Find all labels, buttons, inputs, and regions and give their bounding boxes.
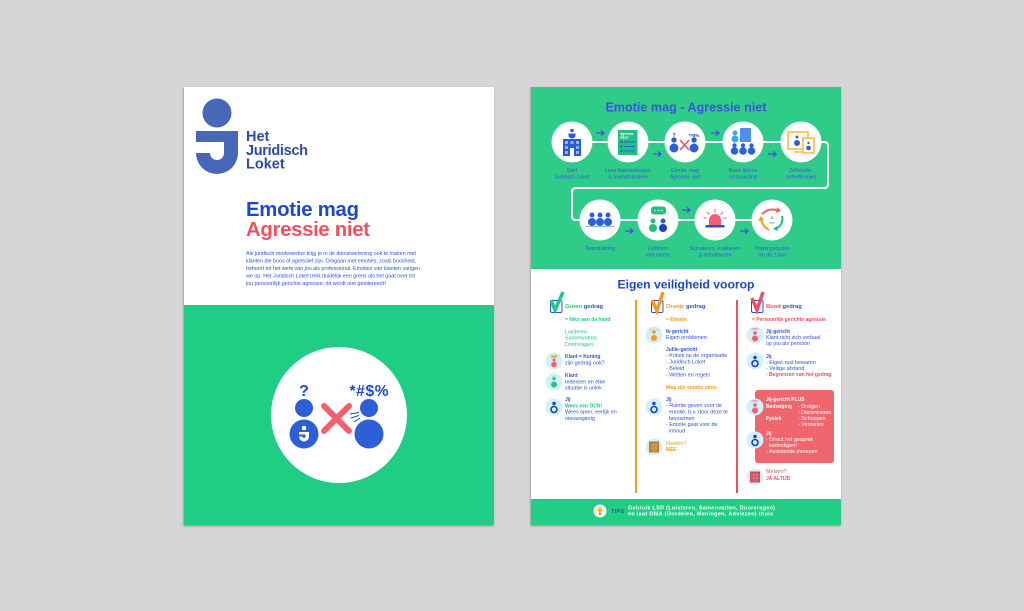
logo wordmark [246, 129, 308, 172]
step: agressiewijzer: Agressie [620, 132, 634, 136]
summary: = Emotie [666, 317, 687, 323]
heading: eigen veiligheid voorop: Eigen veiligheid voorop [618, 278, 754, 292]
step: emotie mag agressie niet: Agressie niet [670, 174, 701, 180]
text: klant: Klant [565, 373, 578, 379]
step: basis tijdens on-boarding: Basis tijdens [728, 168, 758, 174]
icon: light bulb [594, 504, 606, 518]
text: threat types: - Dreigen [798, 404, 820, 410]
text: jij: - Eigen rust bewaren [766, 360, 816, 366]
tips text [628, 506, 775, 518]
icon: client [546, 374, 562, 390]
text: jij: Jij [565, 397, 571, 403]
text: jij-gericht [766, 329, 820, 347]
step: teamtraining [580, 200, 620, 252]
text: jullie-gericht [666, 347, 727, 378]
intro paragraph: Als juridisch medewerker krijg je in de dienstverlening ook te maken met [246, 251, 416, 257]
step: oefenen met acteur: met acteur [646, 252, 671, 258]
text: threat types: - Schoppen [798, 416, 826, 422]
text: jij: Wees open, eerlijk en [565, 410, 617, 416]
illustration: client confrontation [271, 347, 407, 483]
text: jij: Wees een OCN! [565, 404, 602, 410]
text: threat types [766, 397, 831, 428]
list: LSD: Samenvatten [565, 336, 597, 342]
text: jij actions: Jij [766, 431, 772, 437]
text: jij-gericht: Klant richt zich verbaal [766, 335, 820, 341]
icon: jij [646, 398, 662, 416]
text: klant koning [565, 354, 605, 366]
logo wordmark: Het [246, 129, 270, 145]
title: Emotie mag - Agressie niet [606, 100, 767, 114]
icon: orange check [652, 292, 663, 312]
icon: jij [546, 398, 562, 416]
text: jij: - Ruimte geven voor de [666, 403, 722, 409]
text: threat types: Fysiek [766, 416, 782, 422]
text: threat types: Bedreiging [766, 404, 792, 410]
text: threat types: - Discrimineren [798, 410, 831, 416]
step: trainingscyclus: om de 2 jaar [758, 252, 787, 258]
text: melden [766, 469, 791, 482]
step: signaleren: & actualiseren [699, 252, 732, 258]
connector path [572, 142, 828, 220]
step: trainingscyclus: 2 [771, 215, 774, 220]
text: jij-gericht: op jou als persoon [766, 341, 810, 347]
intro paragraph: behoort tot het werk van jou als professional. Emoties van klanten vangen [246, 266, 420, 272]
step: emotie mag agressie niet [664, 122, 706, 180]
intro paragraph: jou persoonlijk gerichte agressie: dit wordt niet getolereerd! [245, 281, 386, 287]
text: jij: - Begrenzen van het gedrag [766, 372, 832, 378]
text: jij: Jij [666, 397, 672, 403]
divider red [736, 300, 738, 493]
icon: angry person: *#$% [751, 327, 759, 331]
heading: Emotie mag [246, 199, 359, 221]
text: jij-gericht: Jij-gericht [766, 329, 790, 335]
callout: threat box [746, 390, 834, 463]
icon: red check [752, 292, 763, 312]
person with logo: ? [299, 383, 309, 400]
icon: angry person: *#$% [751, 399, 759, 403]
step: basis tijdens on-boarding [722, 122, 764, 180]
icon: ik [646, 326, 662, 344]
text: melden [666, 441, 687, 453]
panel: front page green lower section [184, 305, 494, 525]
text: jij: - Veilige afstand [766, 366, 804, 372]
text: klant koning: zijn gedrag ook? [565, 360, 605, 366]
intro paragraph: klanten die boos of agressief zijn. Omgaan met emoties, zoals boosheid, [246, 258, 416, 264]
step: emotie mag agressie niet: *#$% [689, 133, 699, 138]
text: jij [766, 354, 832, 378]
step: trainingscyclus: Trainingscyclus [754, 246, 790, 252]
text: jij actions: - Assistentie inroepen [766, 449, 818, 455]
text: jullie-gericht: - Kritiek op de organisatie [666, 353, 727, 359]
callout: Mag zijn emotie uiten [666, 385, 717, 391]
text: jij actions [766, 431, 818, 455]
text: jij: nieuwsgierig [565, 416, 595, 422]
step: agressiewijzer: Lees Agressiewijzer [605, 168, 651, 174]
text: jullie-gericht: - Wetten en regels [666, 372, 710, 378]
panel: rood gedrag [746, 292, 834, 486]
arrows row 2 [625, 208, 748, 234]
step: zelfstudie: oefenfilmpjes [786, 174, 817, 180]
step: oefenen met acteur: Oefenen [648, 246, 668, 252]
text: melden: Melden? [766, 469, 787, 475]
list: LSD: Luisteren [565, 330, 587, 336]
text: klant: situatie is uniek [565, 386, 602, 392]
heading: Agressie niet [246, 219, 370, 241]
icon: jij [746, 432, 764, 448]
tips text: Gebruik LSD (Luisteren, Samenvatten, Doorvragen) [628, 506, 775, 512]
summary: = Persoonlijk gerichte agressie [752, 317, 826, 323]
text: jij: benoemen [669, 416, 694, 422]
text: jij: inhoud [669, 428, 685, 434]
step: agressiewijzer: & teamafspraken [608, 174, 648, 180]
step: trainingscyclus [752, 200, 792, 258]
text: ik-gericht [666, 329, 707, 341]
step: start: Juridisch Loket [555, 174, 590, 180]
text: klant koning: Klant = Koning [565, 354, 600, 360]
text: ik-gericht: Ik-gericht [666, 329, 689, 335]
step: emotie mag agressie niet: Emotie mag [671, 168, 699, 174]
step: signaleren: Signaleren, evalueren [690, 246, 740, 252]
text: melden: Melden? [666, 441, 687, 447]
arrows row 1 [596, 130, 776, 156]
heading [246, 199, 370, 241]
panel: training journey [531, 87, 841, 269]
step: trainingscyclus: jaar [768, 220, 775, 224]
step: signaleren [690, 200, 740, 258]
text: jullie-gericht: - Juridisch Loket [666, 360, 706, 366]
text: jullie-gericht: - Beleid [666, 366, 684, 372]
angry person: *#$% [350, 383, 389, 400]
text: jij actions: - Direct het gesprek [766, 437, 813, 443]
step: zelfstudie [780, 122, 822, 180]
step: teamtraining: Teamtraining [585, 246, 615, 252]
logo icon: J with head [196, 98, 238, 174]
heading: Groen gedrag [565, 304, 603, 310]
text: klant: Iedereen en elke [565, 380, 605, 386]
icon: angry person [746, 326, 764, 344]
text: jij: - Emotie gaat voor de [666, 422, 718, 428]
heading: Oranje gedrag [666, 304, 706, 310]
intro paragraph: we op. Het Juridisch Loket trekt duidelijk een grens als het gaat over tot [245, 274, 416, 280]
tips text: en laat OMA (Oordelen, Meningen, Adviezen) thuis [628, 512, 773, 518]
panel: tips footer [531, 499, 841, 525]
panel: back page [531, 87, 841, 525]
list: LSD: Doorvragen [565, 342, 593, 348]
heading: Rood gedrag [766, 304, 802, 310]
step: start: Start [567, 168, 578, 174]
panel: oranje gedrag [646, 292, 728, 456]
summary: = Niks aan de hand [565, 317, 610, 323]
text: melden: JA ALTIJD [766, 476, 791, 482]
text: jij [565, 397, 617, 422]
text: jij: emotie, b.v. door deze te [669, 410, 728, 416]
panel: front page [184, 87, 494, 525]
intro paragraph [245, 251, 420, 287]
text: jij: Jij [766, 354, 772, 360]
step: oefenen met acteur [638, 200, 678, 258]
red cross [324, 406, 349, 431]
icon: calculator [646, 438, 662, 456]
icon: green check [550, 292, 563, 312]
logo wordmark: Juridisch [246, 143, 308, 159]
text: jij actions: beëindigen! [769, 443, 797, 449]
list: LSD [565, 330, 597, 348]
divider orange [635, 300, 637, 493]
text: threat types: - Vernielen [798, 422, 824, 428]
icon: calculator [746, 468, 764, 486]
step: start [552, 122, 592, 180]
logo wordmark: Loket [246, 156, 285, 172]
step: zelfstudie: Zelfstudie: [789, 168, 813, 174]
text: jij [666, 397, 728, 434]
step: agressiewijzer [605, 122, 651, 180]
text: melden: NEE [666, 447, 677, 453]
step: agressiewijzer: wijzer [619, 136, 630, 140]
icon: jij [746, 352, 764, 370]
label: tips: TIPS [611, 509, 624, 515]
step: basis tijdens on-boarding: on-boarding [729, 174, 757, 180]
text: ik-gericht: Eigen problemen [666, 335, 707, 341]
text: jullie-gericht: Jullie-gericht [666, 347, 697, 353]
text: threat types: Jij-gericht PLUS [766, 397, 805, 403]
panel: groen gedrag [546, 292, 617, 422]
step: emotie mag agressie niet: ? [672, 133, 676, 139]
text: klant [565, 373, 605, 392]
icon: king [546, 352, 562, 370]
